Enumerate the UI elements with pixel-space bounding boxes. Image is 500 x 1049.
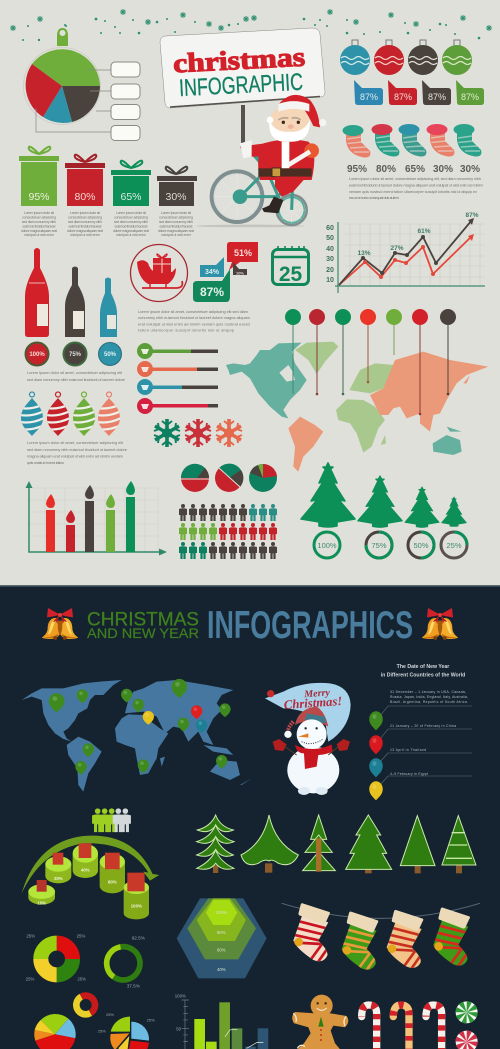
- gift captions: sed diam nonummy nibh: [114, 220, 148, 224]
- gingerbread man: [292, 995, 348, 1049]
- tilted pie right: [110, 1017, 149, 1049]
- bauble caption: [27, 440, 128, 465]
- data labels: 27%: [390, 245, 404, 252]
- hexagon labels: 100%: [216, 910, 227, 915]
- dark bottle: [65, 266, 85, 337]
- tree infographic: [301, 463, 466, 527]
- tree striped: [442, 816, 476, 873]
- cane 3: [426, 1005, 442, 1049]
- list rows: Brazil, Argentina, Republic of South Africa.: [390, 700, 468, 704]
- new year date list: [369, 664, 472, 800]
- list title: in Different Countries of the World: [381, 672, 465, 678]
- bell right: [422, 608, 458, 640]
- donut labels: 25%: [26, 977, 34, 982]
- pie 1: [181, 464, 209, 492]
- bike frame: [240, 157, 293, 210]
- list title: [381, 664, 465, 678]
- stocking percentages: 30%: [433, 164, 453, 175]
- bar teal: [137, 379, 218, 395]
- candle flames: [46, 494, 55, 508]
- gift captions: sed diam nonummy nibh: [22, 220, 56, 224]
- line chart: [326, 212, 485, 293]
- gift 30%: [157, 167, 197, 206]
- chart grid: [29, 488, 158, 552]
- tag green: 87%: [461, 92, 479, 102]
- percent tags row: [354, 80, 484, 105]
- data labels: 13%: [357, 250, 371, 257]
- bauble caption: Lorem ipsum dolor sit amet, consectetuer adipiscing elit: [27, 440, 124, 445]
- mittens: [273, 739, 287, 751]
- line overlay: [225, 1029, 263, 1048]
- front wheel: [277, 195, 307, 225]
- yellow pin: [143, 711, 154, 725]
- data labels: [357, 212, 479, 257]
- tree triangle: [400, 816, 435, 873]
- cylinder 2: 20%: [54, 876, 63, 881]
- y axis labels: 20: [326, 267, 334, 274]
- hanging stockings: [282, 903, 480, 972]
- divider line: [0, 585, 500, 586]
- red series: [339, 236, 472, 285]
- axis labels: [175, 993, 186, 1032]
- people group: [92, 808, 131, 832]
- pie labels: 25%: [106, 1012, 114, 1017]
- ring labels: [127, 935, 145, 988]
- bauble caption: magna aliquam erat volutpat ut wisi enim ad minim veniam: [27, 454, 124, 458]
- bottle caption: [27, 370, 126, 382]
- bottom pie charts: [34, 1012, 155, 1049]
- bauble caption: sed diam nonummy nibh euismod tincidunt ut laoreet dolore: [27, 447, 128, 452]
- bottle caption: sed diam nonummy nibh euismod tincidunt ut laoreet dolore: [27, 377, 126, 382]
- y axis labels: 60: [326, 225, 334, 232]
- gift captions: dolore magna aliquam erat: [158, 229, 194, 233]
- title sign: [160, 28, 325, 147]
- gift 95%: [19, 147, 59, 206]
- tree percentage rings: [314, 532, 467, 558]
- rear wheel: [212, 171, 262, 222]
- gift captions: Lorem ipsum dolor sit: [161, 211, 191, 215]
- chart grid: [345, 224, 485, 286]
- small ring: [73, 992, 98, 1018]
- donut labels: [26, 934, 86, 982]
- santa arm and mitten: [240, 143, 265, 157]
- africa: [336, 399, 385, 453]
- snowman head: [297, 719, 327, 749]
- gift captions: Lorem ipsum dolor sit: [24, 211, 54, 215]
- pie 2: [215, 464, 243, 492]
- axis labels: 50: [176, 1027, 182, 1032]
- stocking percentages: 95%: [347, 164, 367, 175]
- stocking caption: veniam quis nostrud exerci tation ullamcorper suscipit lobortis nisl ut aliquip ex: [349, 189, 477, 194]
- bottle percentages: [26, 342, 122, 366]
- tag red: 87%: [394, 92, 412, 102]
- sleigh caption: Lorem ipsum dolor sit amet, consectetuer adipiscing elit sed diam: [138, 309, 249, 314]
- stocking red: [290, 903, 330, 964]
- santa legs and boot: [275, 177, 307, 197]
- donut labels: 25%: [77, 977, 86, 982]
- hudson bay: [279, 365, 295, 382]
- pin yellow: [369, 781, 383, 800]
- y axis: [182, 1000, 189, 1049]
- striped baubles: [20, 392, 121, 436]
- heading: and new year: AND NEW YEAR: [87, 625, 199, 641]
- bubble 34%: 34%: [205, 269, 220, 276]
- gift captions: euismod tincidunt laoreet: [160, 224, 192, 228]
- tree percentage rings: 25%: [446, 541, 462, 550]
- gift captions: euismod tincidunt laoreet: [22, 224, 56, 228]
- sleigh caption: nonummy nibh euismod tincidunt ut laoreet dolore magna aliquam: [138, 315, 251, 320]
- sign post: [241, 105, 245, 147]
- ball: dark: [408, 40, 438, 75]
- sleigh icon: [130, 244, 188, 302]
- sleigh caption: erat volutpat ut wisi enim ad minim veniam quis nostrud exerci: [138, 322, 250, 326]
- candle bar chart: [26, 481, 167, 556]
- stocking percentages: 65%: [405, 164, 425, 175]
- bottle caption: Lorem ipsum dolor sit amet, consectetuer adipiscing elit: [27, 370, 123, 375]
- snowman hat: [288, 722, 293, 735]
- gift captions: consectetuer adipiscing: [159, 216, 193, 220]
- hexagon pyramid: [177, 898, 267, 978]
- gift captions: sed diam nonummy nibh: [159, 220, 193, 224]
- santa on a bicycle: [195, 95, 326, 227]
- cylinder 1: 10%: [37, 900, 46, 905]
- gift 65%: 65%: [120, 191, 142, 203]
- stockings row: [342, 124, 481, 158]
- rope: [282, 903, 480, 918]
- bauble caption: quis nostrud exerci tation: [27, 460, 64, 465]
- y axis labels: 10: [326, 277, 334, 284]
- calendar icon: 25: [279, 263, 302, 286]
- candy canes: [362, 1005, 442, 1049]
- sleigh caption: [138, 309, 251, 332]
- axis labels: 100%: [175, 993, 186, 998]
- pie labels: 25%: [147, 1018, 155, 1023]
- hexagon labels: [216, 910, 227, 972]
- gift captions: sed diam nonummy nibh: [68, 220, 102, 224]
- stocking percentages: 30%: [460, 164, 480, 175]
- background: dark lower panel: [0, 586, 500, 1049]
- gift captions: dolore magna aliquam erat: [21, 229, 57, 233]
- stocking orange: [383, 910, 423, 971]
- stocking percentages: 80%: [376, 164, 396, 175]
- peppermint candies: [456, 1001, 478, 1049]
- curved arrow: [22, 836, 159, 893]
- mint red: [456, 1031, 478, 1049]
- dark title banner: [42, 604, 458, 647]
- y axis labels: 30: [326, 256, 334, 263]
- red bottle: [25, 248, 49, 337]
- bottle percentages: 75%: [69, 352, 82, 358]
- greenland: [295, 342, 338, 374]
- europe: [349, 363, 395, 393]
- speech bubble: [265, 683, 351, 742]
- gift 80%: 80%: [74, 191, 96, 203]
- ring labels: 62.5%: [132, 935, 145, 940]
- snowman body: [287, 747, 339, 793]
- bar chart with line: [175, 993, 268, 1049]
- list title: The Date of New Year: [397, 664, 449, 670]
- gift captions: euismod tincidunt laoreet: [114, 224, 148, 228]
- background: light top panel: [0, 0, 500, 586]
- australia: [433, 435, 462, 455]
- list rows: 4–9 February in Egypt: [390, 772, 428, 776]
- snowman with speech bubble: [265, 683, 351, 795]
- donut labels: 25%: [77, 934, 85, 939]
- stocking caption: euismod tincidunt ut laoreet dolore magna aliquam erat volutpat ut wisi enim ad minim: [349, 182, 484, 188]
- bars: [194, 1019, 205, 1049]
- data labels: 61%: [417, 228, 431, 235]
- y axis labels: 50: [326, 235, 334, 242]
- gift captions: dolore magna aliquam erat: [113, 229, 149, 233]
- hexagon labels: 40%: [217, 967, 226, 972]
- dark series: [339, 220, 472, 285]
- asia: [370, 352, 488, 432]
- map pins: [285, 309, 456, 415]
- list rows: Russia, Japan, India, England, Italy, Australia,: [390, 695, 468, 699]
- gift captions: volutpat ut wisi enim: [116, 233, 146, 237]
- gift captions: Lorem ipsum dolor sit: [116, 211, 146, 215]
- continents: [22, 680, 252, 792]
- scarf: [295, 744, 333, 769]
- hexagon labels: 60%: [217, 948, 226, 953]
- santa body: [258, 140, 314, 180]
- bike shadow: [195, 225, 305, 227]
- tree trunk tiers: [303, 815, 335, 872]
- pin green: [369, 711, 383, 730]
- tree layered: [197, 815, 234, 873]
- bar red: [137, 398, 218, 414]
- north america: [226, 343, 307, 418]
- six christmas trees: [197, 815, 476, 873]
- tree zigzag: [346, 815, 392, 873]
- bubble text: Christmas!: [283, 694, 343, 712]
- stocking caption: Lorem ipsum dolor sit amet, consectetuer adipiscing elit, sed diam nonummy nibh: [349, 176, 481, 181]
- dark world map: [22, 679, 252, 792]
- south america: [288, 417, 323, 472]
- christmas balls row: [340, 40, 472, 75]
- gift captions: volutpat ut wisi enim: [70, 233, 100, 237]
- bubble 51%: 51%: [234, 248, 252, 258]
- gift 95%: 95%: [28, 191, 50, 203]
- bottle percentages: 100%: [29, 352, 45, 358]
- tree percentage rings: 75%: [371, 541, 387, 550]
- gift 65%: [111, 161, 151, 206]
- four segment donut: [41, 943, 72, 975]
- bottle chart: [25, 248, 117, 337]
- ring labels: 37.5%: [127, 983, 140, 988]
- tree curved: [241, 815, 298, 873]
- gift 80%: [65, 155, 105, 206]
- pie labels: [98, 1012, 155, 1034]
- pie chart ornament: [24, 28, 100, 124]
- gift captions: consectetuer adipiscing: [114, 216, 148, 220]
- gift captions: euismod tincidunt laoreet: [68, 224, 102, 228]
- list rows: 31 December – 1 January in USA, Canada,: [390, 690, 466, 694]
- stocking striped green: [430, 907, 470, 968]
- gift captions: Lorem ipsum dolor sit: [70, 211, 100, 215]
- santa hat: [279, 95, 320, 127]
- gift captions: consectetuer adipiscing: [68, 216, 102, 220]
- stocking percentages: [347, 164, 480, 175]
- gift cylinder chart: [22, 808, 159, 919]
- gift captions: volutpat ut wisi enim: [24, 233, 54, 237]
- tag dark: 87%: [428, 92, 446, 102]
- data labels: 87%: [465, 212, 479, 219]
- stocking caption: ea commodo consequat duis autem: [349, 195, 400, 200]
- pie chart legend boxes: [36, 62, 140, 140]
- y axis labels: [326, 225, 334, 284]
- chart axes: [29, 486, 162, 552]
- bell left: [42, 608, 78, 640]
- heading: christmas: CHRISTMAS: [87, 608, 199, 630]
- ball: red: [374, 40, 404, 75]
- donut labels: 25%: [26, 934, 35, 939]
- pie 3: [249, 464, 277, 492]
- list rows: 13 April in Thailand: [390, 748, 426, 752]
- gift bar chart: [19, 147, 197, 206]
- y axis labels: 40: [326, 246, 334, 253]
- chart axes: [335, 222, 485, 293]
- gift captions: consectetuer adipiscing: [22, 216, 56, 220]
- cane 1: [362, 1005, 377, 1049]
- list rows: [390, 690, 468, 776]
- hexagon labels: 80%: [217, 930, 226, 935]
- bubble small: 10%: [236, 270, 244, 275]
- sleigh caption: tation ullamcorper suscipit lobortis nisl ut aliquip: [138, 328, 235, 332]
- cylinder 4: 80%: [108, 880, 117, 885]
- gift captions: volutpat ut wisi enim: [161, 233, 191, 237]
- tilted pie left: [34, 1014, 76, 1049]
- stocking caption: [349, 176, 484, 200]
- cylinder 5: 100%: [131, 903, 142, 908]
- pin red: [369, 735, 383, 754]
- cane 2: [393, 1005, 409, 1049]
- pie labels: 25%: [98, 1029, 106, 1034]
- tag teal: 87%: [360, 92, 378, 102]
- snowflake garland: [10, 9, 492, 41]
- heading: infographics: INFOGRAPHICS: [207, 604, 413, 647]
- calendar icon: [272, 246, 309, 286]
- red pin: [191, 705, 202, 719]
- snowflakes: [154, 419, 242, 447]
- bar green: [137, 343, 218, 359]
- gift captions: dolore magna aliquam erat: [67, 229, 103, 233]
- segmented donut charts: [26, 934, 147, 1018]
- progress bars: [137, 343, 218, 414]
- green map pins: [49, 679, 231, 775]
- bubble 87%: 87%: [200, 285, 224, 299]
- teal bottle: [100, 278, 117, 337]
- ball: green: [442, 40, 472, 75]
- gift 30%: 30%: [165, 191, 187, 203]
- people pictogram: [179, 504, 277, 559]
- bottle percentages: 50%: [104, 352, 117, 358]
- world map: colored continents: [226, 342, 488, 472]
- callout bubbles: [193, 242, 258, 302]
- list rows: 21 January – 20 of February in China: [390, 724, 456, 728]
- stocking green: [338, 911, 378, 972]
- bubble text: Merry: [303, 687, 331, 700]
- pin teal: [369, 758, 383, 777]
- mint green: [456, 1001, 478, 1023]
- small pie charts: [181, 464, 277, 492]
- santa head and beard: [270, 105, 309, 136]
- teal pin: [196, 719, 207, 733]
- ornament cap: [57, 28, 68, 46]
- title: infographic: INFOGRAPHIC: [178, 69, 304, 102]
- cylinder 3: 40%: [81, 868, 90, 873]
- gift captions: [21, 211, 194, 237]
- tree percentage rings: 50%: [413, 541, 429, 550]
- bar salmon: [137, 361, 218, 377]
- title: christmas: christmas: [172, 42, 306, 78]
- ball: teal: [340, 40, 370, 75]
- connector lines: [380, 706, 472, 785]
- two segment ring: [100, 940, 147, 987]
- tree percentage rings: 100%: [317, 541, 337, 550]
- candle bars: [46, 510, 55, 552]
